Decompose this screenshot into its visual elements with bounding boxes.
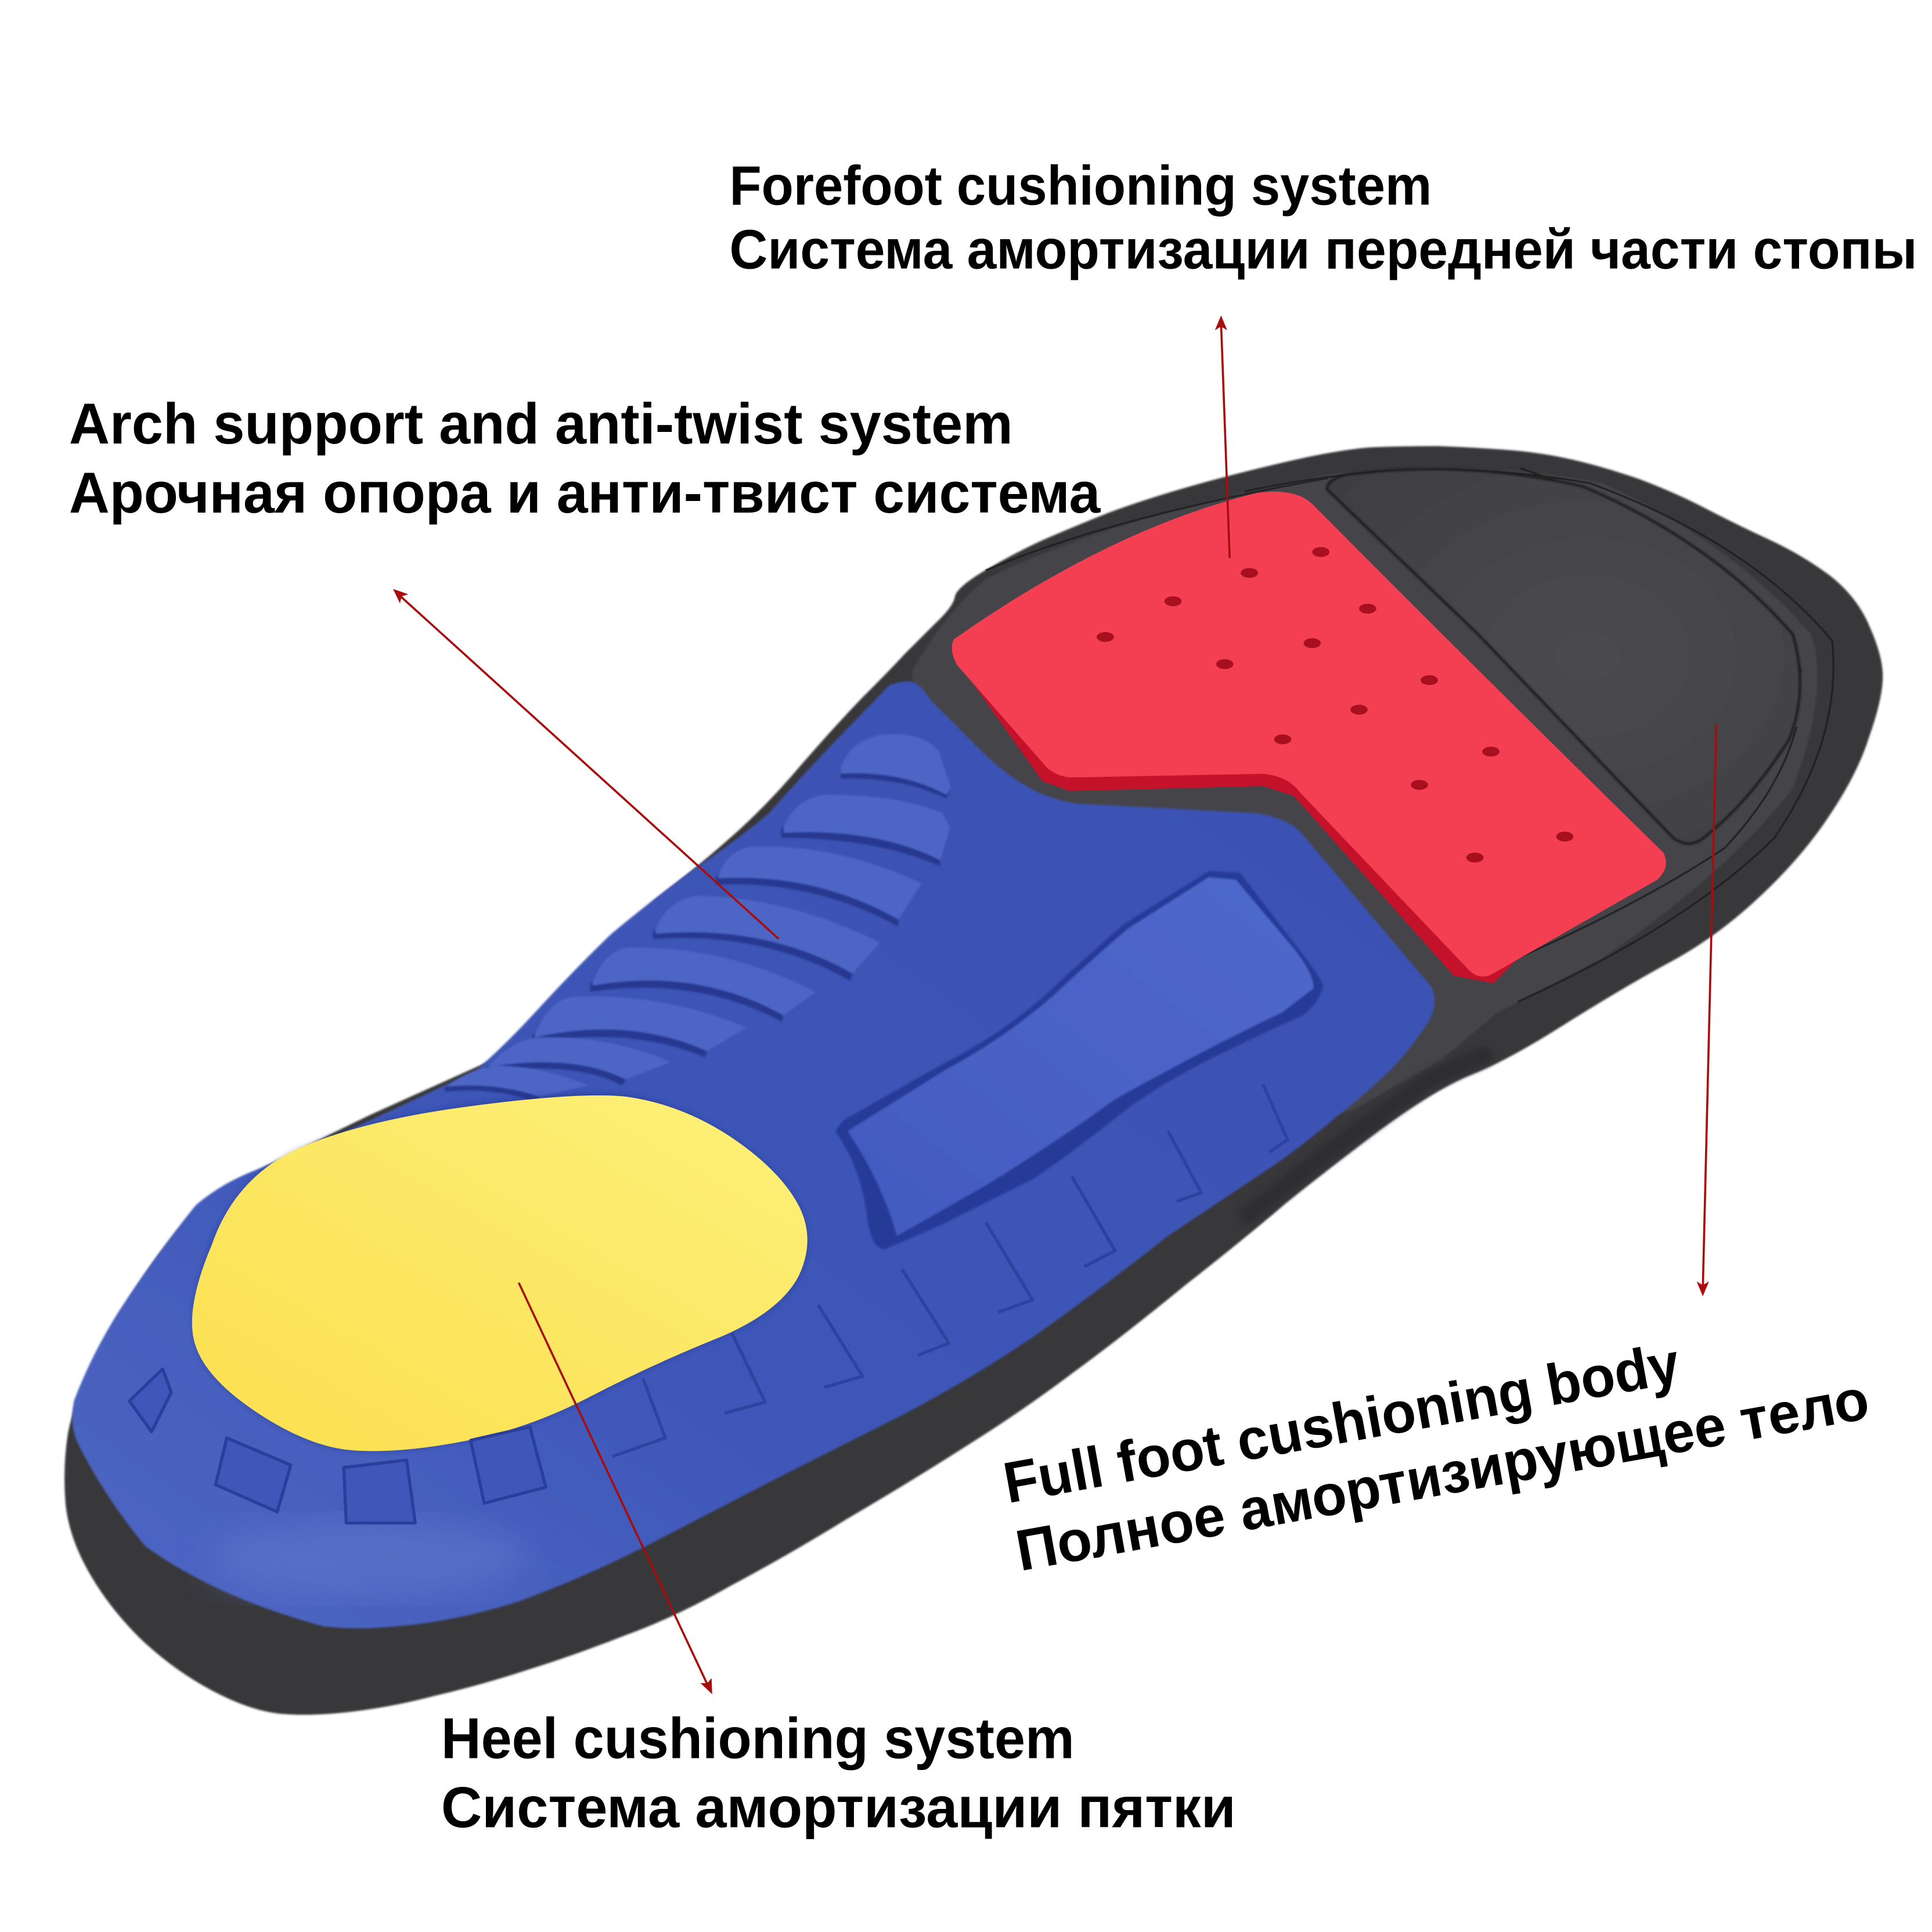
arrow: heel [519,1282,712,1694]
pad face [848,877,1314,1236]
label: arch support: Арочная опора и анти-твист система [69,461,1101,525]
red pad face [952,492,1666,976]
label: heel cushioning: Heel cushioning system [441,1707,1075,1771]
recessed squares [129,1369,546,1523]
blue arch and heel shell [73,682,1434,1628]
heel pocket shadow [200,1101,799,1444]
sole: upper gray band around pads [912,468,1818,1232]
label: heel cushioning [441,1707,1236,1840]
arrow: full foot body [1697,724,1717,1296]
label: arch support: Arch support and anti-twist system [69,392,1013,456]
sole: dark lower edge [1248,1055,1485,1215]
label: arch support [69,392,1101,525]
long arch support pad [835,871,1324,1249]
corner notches [612,1084,1288,1457]
yellow heel pad [192,1095,808,1451]
rib faces [447,734,951,1097]
forefoot groove lines [986,468,1833,1002]
rib shadows [445,767,951,1101]
arch ribs [445,734,951,1101]
red pad side shadow [951,653,1516,983]
arrow: forefoot [1215,315,1230,558]
red forefoot pad [951,492,1666,983]
toe panel [1327,469,1800,844]
label: forefoot cushioning: Forefoot cushioning system [729,155,1432,217]
heel rim highlight [210,1519,530,1598]
pad shadow [835,871,1324,1249]
perforation holes [1097,547,1573,863]
arrow: arch [393,589,778,939]
heel rim blocks [129,1084,1288,1523]
label: heel cushioning: Система амортизации пятки [441,1776,1236,1840]
label: full foot cushioning body: Full foot cushioning body [999,1331,1684,1516]
sole: dark cushioning body [64,446,1883,1715]
label: full foot cushioning body: Полное амортизирующее тело [1011,1367,1874,1584]
insole photo [64,446,1883,1715]
label: forefoot cushioning [729,155,1917,281]
